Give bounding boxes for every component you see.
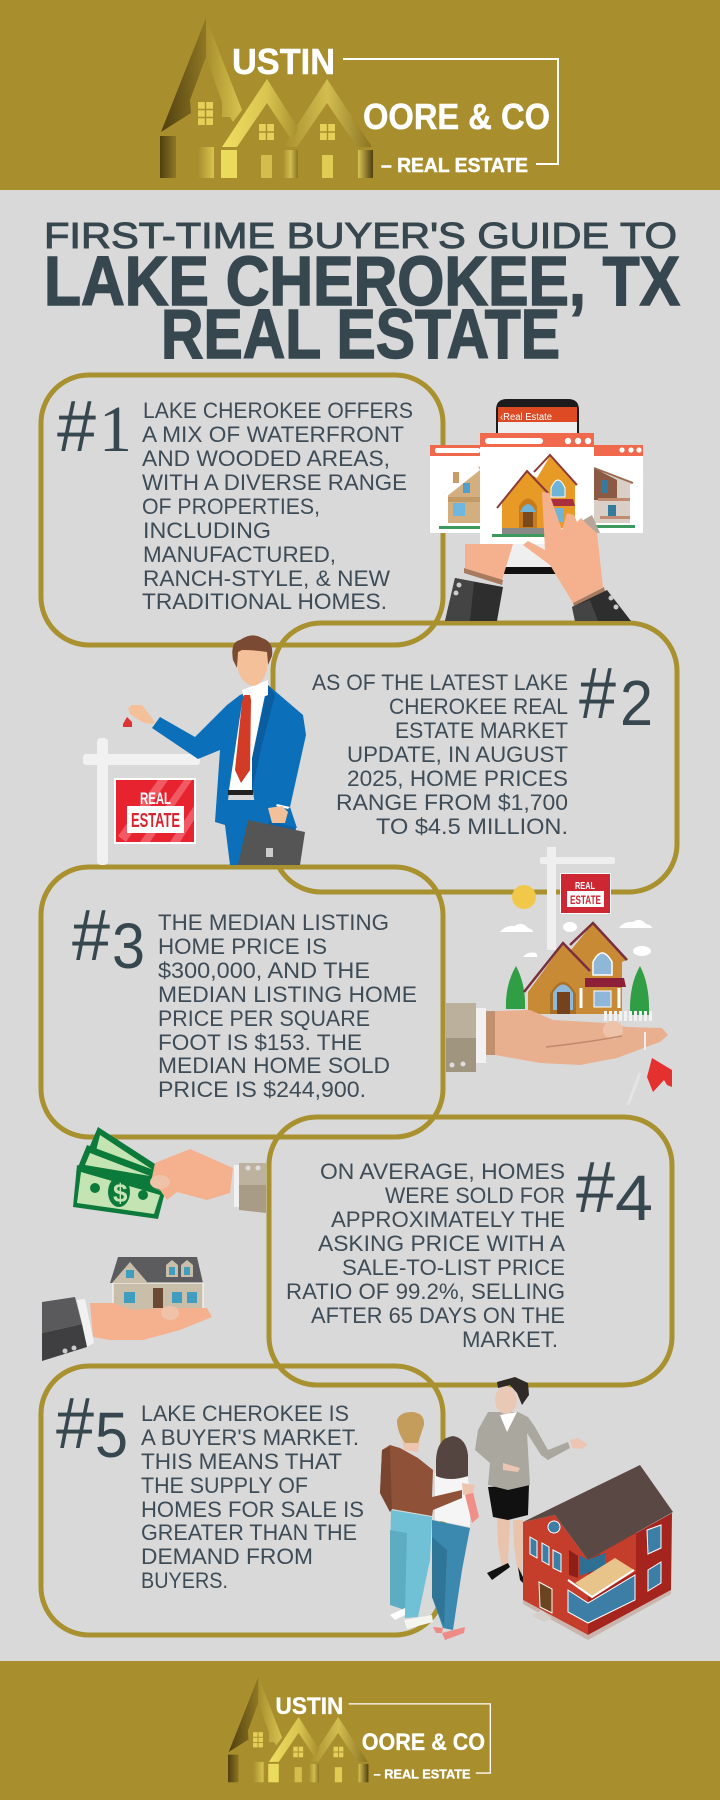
panel: fact 1: TRADITIONAL HOMES. <box>142 589 387 614</box>
panel: fact 1: WITH A DIVERSE RANGE <box>142 470 407 495</box>
panel: fact 5: A BUYER'S MARKET. <box>141 1425 359 1450</box>
logo: footer <box>228 1677 490 1782</box>
panel: fact 1: INCLUDING <box>143 518 271 543</box>
panel: fact 4: RATIO OF 99.2%, SELLING <box>286 1279 565 1304</box>
panel: fact 5: GREATER THAN THE <box>141 1520 357 1545</box>
panel: fact 3: PRICE IS $244,900. <box>158 1077 366 1102</box>
panel: fact 4: AFTER 65 DAYS ON THE <box>311 1303 565 1328</box>
panel: fact 5: 5 <box>95 1399 128 1471</box>
logo: header <box>160 18 558 178</box>
panel: fact 4: ON AVERAGE, HOMES <box>320 1159 565 1184</box>
illustration: hand holding money <box>73 1127 266 1219</box>
panel: fact 3: MEDIAN HOME SOLD <box>158 1053 390 1078</box>
panel: fact 2: 2025, HOME PRICES <box>347 766 568 791</box>
panel: fact 3: HOME PRICE IS <box>158 934 327 959</box>
panel: fact 3: 3 <box>112 910 145 982</box>
panel: fact 4: ASKING PRICE WITH A <box>318 1231 565 1256</box>
panel: fact 4: # <box>576 1148 615 1228</box>
panel: fact 2: RANGE FROM $1,700 <box>336 790 568 815</box>
panel: fact 3: FOOT IS $153. THE <box>158 1030 362 1055</box>
illustration: hand holding money: $ <box>113 1178 128 1208</box>
illustration: agent with sign <box>83 635 306 865</box>
illustration: hand holding small house <box>42 1257 212 1361</box>
panel: fact 5: LAKE CHEROKEE IS <box>141 1401 349 1426</box>
panel: fact 2: ESTATE MARKET <box>395 718 568 743</box>
panel: fact 4: MARKET. <box>462 1327 558 1352</box>
panel: fact 5 <box>41 1366 443 1635</box>
title <box>44 215 680 373</box>
title: REAL ESTATE <box>161 295 560 373</box>
illustration: phone listings and hands <box>430 399 643 621</box>
panel: fact 2: AS OF THE LATEST LAKE <box>312 670 568 695</box>
panel: fact 5: THE SUPPLY OF <box>141 1473 308 1498</box>
panel: fact 1: MANUFACTURED, <box>143 542 336 567</box>
panel: fact 4 <box>269 1117 672 1385</box>
logo: header: USTIN <box>232 41 335 82</box>
panel: fact 3: THE MEDIAN LISTING <box>158 910 389 935</box>
panel: fact 2: CHEROKEE REAL <box>389 694 568 719</box>
panel: fact 2: 2 <box>620 667 653 739</box>
logo: footer: USTIN <box>275 1694 343 1720</box>
illustration: phone listings and hands: ‹Real Estate <box>500 412 552 423</box>
illustration: agent with sign: REAL <box>140 789 171 808</box>
logo: header: – REAL ESTATE <box>381 155 528 177</box>
panel: fact 3: $300,000, AND THE <box>158 958 370 983</box>
panel: fact 1 <box>41 375 443 645</box>
illustration: hand holding house <box>446 847 672 1105</box>
illustration: hand holding house: ESTATE <box>570 893 601 907</box>
panel: fact 4: APPROXIMATELY THE <box>331 1207 565 1232</box>
panel: fact 1: 1 <box>99 393 132 466</box>
panel: fact 1: A MIX OF WATERFRONT <box>142 422 404 447</box>
illustration: agent with sign: ESTATE <box>131 810 180 832</box>
panel: fact 3: MEDIAN LISTING HOME <box>158 982 417 1007</box>
panel: fact 1: OF PROPERTIES, <box>142 494 320 519</box>
panel: fact 3: PRICE PER SQUARE <box>158 1006 370 1031</box>
panel: fact 4: WERE SOLD FOR <box>385 1183 565 1208</box>
header band <box>0 0 720 190</box>
panel: fact 5: HOMES FOR SALE IS <box>141 1497 364 1522</box>
panel: fact 5: THIS MEANS THAT <box>141 1449 342 1474</box>
panel: fact 4: 4 <box>615 1162 653 1234</box>
panel: fact 5: # <box>56 1384 94 1464</box>
panel: fact 2 <box>273 623 677 892</box>
panel: fact 3 <box>41 867 443 1137</box>
illustration: hand holding house: REAL <box>575 881 595 892</box>
logo: header: OORE & CO <box>363 96 550 137</box>
logo: footer: – REAL ESTATE <box>374 1766 471 1781</box>
panel: fact 1: RANCH-STYLE, & NEW <box>143 566 390 591</box>
panel: fact 1: AND WOODED AREAS, <box>142 446 390 471</box>
panel: fact 4: SALE-TO-LIST PRICE <box>342 1255 565 1280</box>
panel: fact 2: # <box>579 654 616 734</box>
panel: fact 5: DEMAND FROM <box>141 1544 313 1569</box>
logo: footer: OORE & CO <box>362 1730 485 1756</box>
panel: fact 2: UPDATE, IN AUGUST <box>347 742 568 767</box>
panel: fact 5: BUYERS. <box>141 1568 228 1593</box>
title: FIRST-TIME BUYER'S GUIDE TO <box>44 215 677 256</box>
panel: fact 1: # <box>57 387 96 467</box>
panel: fact 3: # <box>72 896 110 976</box>
footer band <box>0 1661 720 1800</box>
panel: fact 2: TO $4.5 MILLION. <box>376 814 568 839</box>
panel: fact 1: LAKE CHEROKEE OFFERS <box>143 398 413 423</box>
illustration: couple with agent and house <box>380 1377 673 1640</box>
